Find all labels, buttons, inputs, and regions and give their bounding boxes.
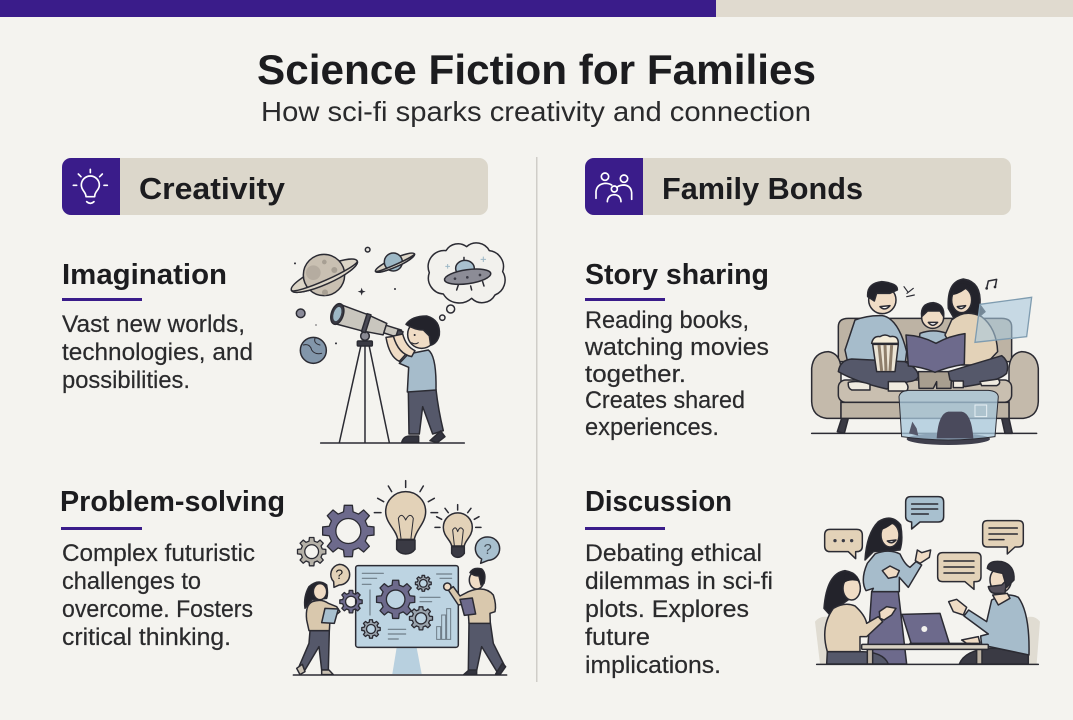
monitor	[356, 566, 458, 674]
icon: earth	[300, 337, 326, 363]
laptop	[902, 613, 970, 644]
ground line	[812, 431, 1037, 436]
icon: family	[596, 173, 632, 202]
speech bubble: question	[331, 564, 350, 587]
speech bubble: question	[475, 537, 500, 563]
ground line	[293, 673, 507, 677]
child	[918, 303, 952, 388]
heading: Creativity	[62, 158, 488, 215]
heading: Family Bonds: Family Bonds	[662, 171, 863, 206]
speech bubble: question: ?	[335, 566, 343, 582]
block: Imagination: Imagination	[62, 259, 227, 291]
block: Discussion: Debating ethical	[585, 540, 762, 567]
heading: Creativity: Creativity	[139, 171, 286, 206]
speech bubble: question: ?	[484, 542, 492, 558]
block: Discussion: future	[585, 624, 650, 651]
panel: creativity column	[60, 158, 507, 675]
block: Imagination: possibilities.	[62, 367, 190, 394]
boy	[386, 316, 445, 443]
block: Discussion: dilemmas in sci-fi	[585, 568, 773, 595]
seated woman	[824, 571, 896, 664]
standing woman	[863, 518, 931, 664]
block: Imagination: Vast new worlds,	[62, 311, 245, 338]
block: Discussion: Discussion	[585, 486, 732, 518]
icon: small light bulb	[435, 505, 481, 557]
man with tablet	[444, 568, 506, 675]
block: Story sharing: together.	[585, 361, 686, 388]
block: Story sharing: watching movies	[584, 334, 769, 361]
block: Problem-solving: overcome. Fosters	[62, 596, 253, 623]
ground line	[817, 662, 1038, 667]
speech bubble: dots	[825, 529, 862, 559]
telescope on tripod	[328, 302, 405, 443]
illustration: boy with telescope	[288, 243, 505, 443]
block: Discussion: implications.	[585, 652, 721, 679]
thought cloud with UFO	[428, 243, 505, 320]
speech bubble: blue	[906, 497, 944, 529]
ground line	[321, 441, 464, 445]
block: Story sharing: experiences.	[585, 414, 719, 441]
block: Problem-solving	[60, 486, 285, 651]
sofa	[812, 318, 1038, 433]
block: Problem-solving: challenges to	[62, 568, 201, 595]
stars and moons	[294, 247, 396, 344]
chairs	[815, 617, 1040, 664]
icon: ringed planet	[288, 253, 361, 298]
panel: family bonds column	[584, 158, 1040, 679]
glass table	[899, 390, 998, 445]
block: Imagination: technologies, and	[62, 339, 253, 366]
block: Story sharing	[584, 259, 769, 441]
illustration: team solving problems	[293, 481, 507, 675]
block: Story sharing: Creates shared	[585, 387, 745, 414]
hologram screen	[975, 297, 1032, 342]
block: Problem-solving: Problem-solving	[60, 486, 285, 518]
block: Problem-solving: Complex futuristic	[62, 540, 255, 567]
top progress bar	[0, 0, 1073, 17]
subtitle: How sci-fi sparks creativity and connection	[261, 96, 811, 127]
block: Discussion: plots. Explores	[585, 596, 749, 623]
seated man	[949, 561, 1029, 664]
man with popcorn	[838, 282, 918, 391]
icon: small ringed planet	[374, 250, 416, 275]
block: Discussion	[585, 486, 773, 679]
block: Story sharing: Reading books,	[585, 307, 749, 334]
illustration: family discussion	[815, 497, 1040, 664]
woman	[945, 279, 1008, 388]
icon: large light bulb	[374, 481, 438, 554]
table	[862, 644, 988, 664]
open book	[906, 334, 965, 372]
speech bubble: tan centre	[938, 553, 981, 589]
icon: gears	[298, 505, 374, 566]
title: Science Fiction for Families	[257, 46, 816, 93]
heading: Family Bonds	[585, 158, 1011, 215]
icon: light bulb	[73, 169, 107, 203]
woman with tablet	[297, 582, 362, 675]
illustration: family on sofa	[812, 279, 1038, 445]
block: Imagination	[62, 259, 253, 394]
speech bubble: tan right	[983, 521, 1023, 554]
block: Problem-solving: critical thinking.	[62, 624, 231, 651]
block: Story sharing: Story sharing	[585, 259, 769, 291]
